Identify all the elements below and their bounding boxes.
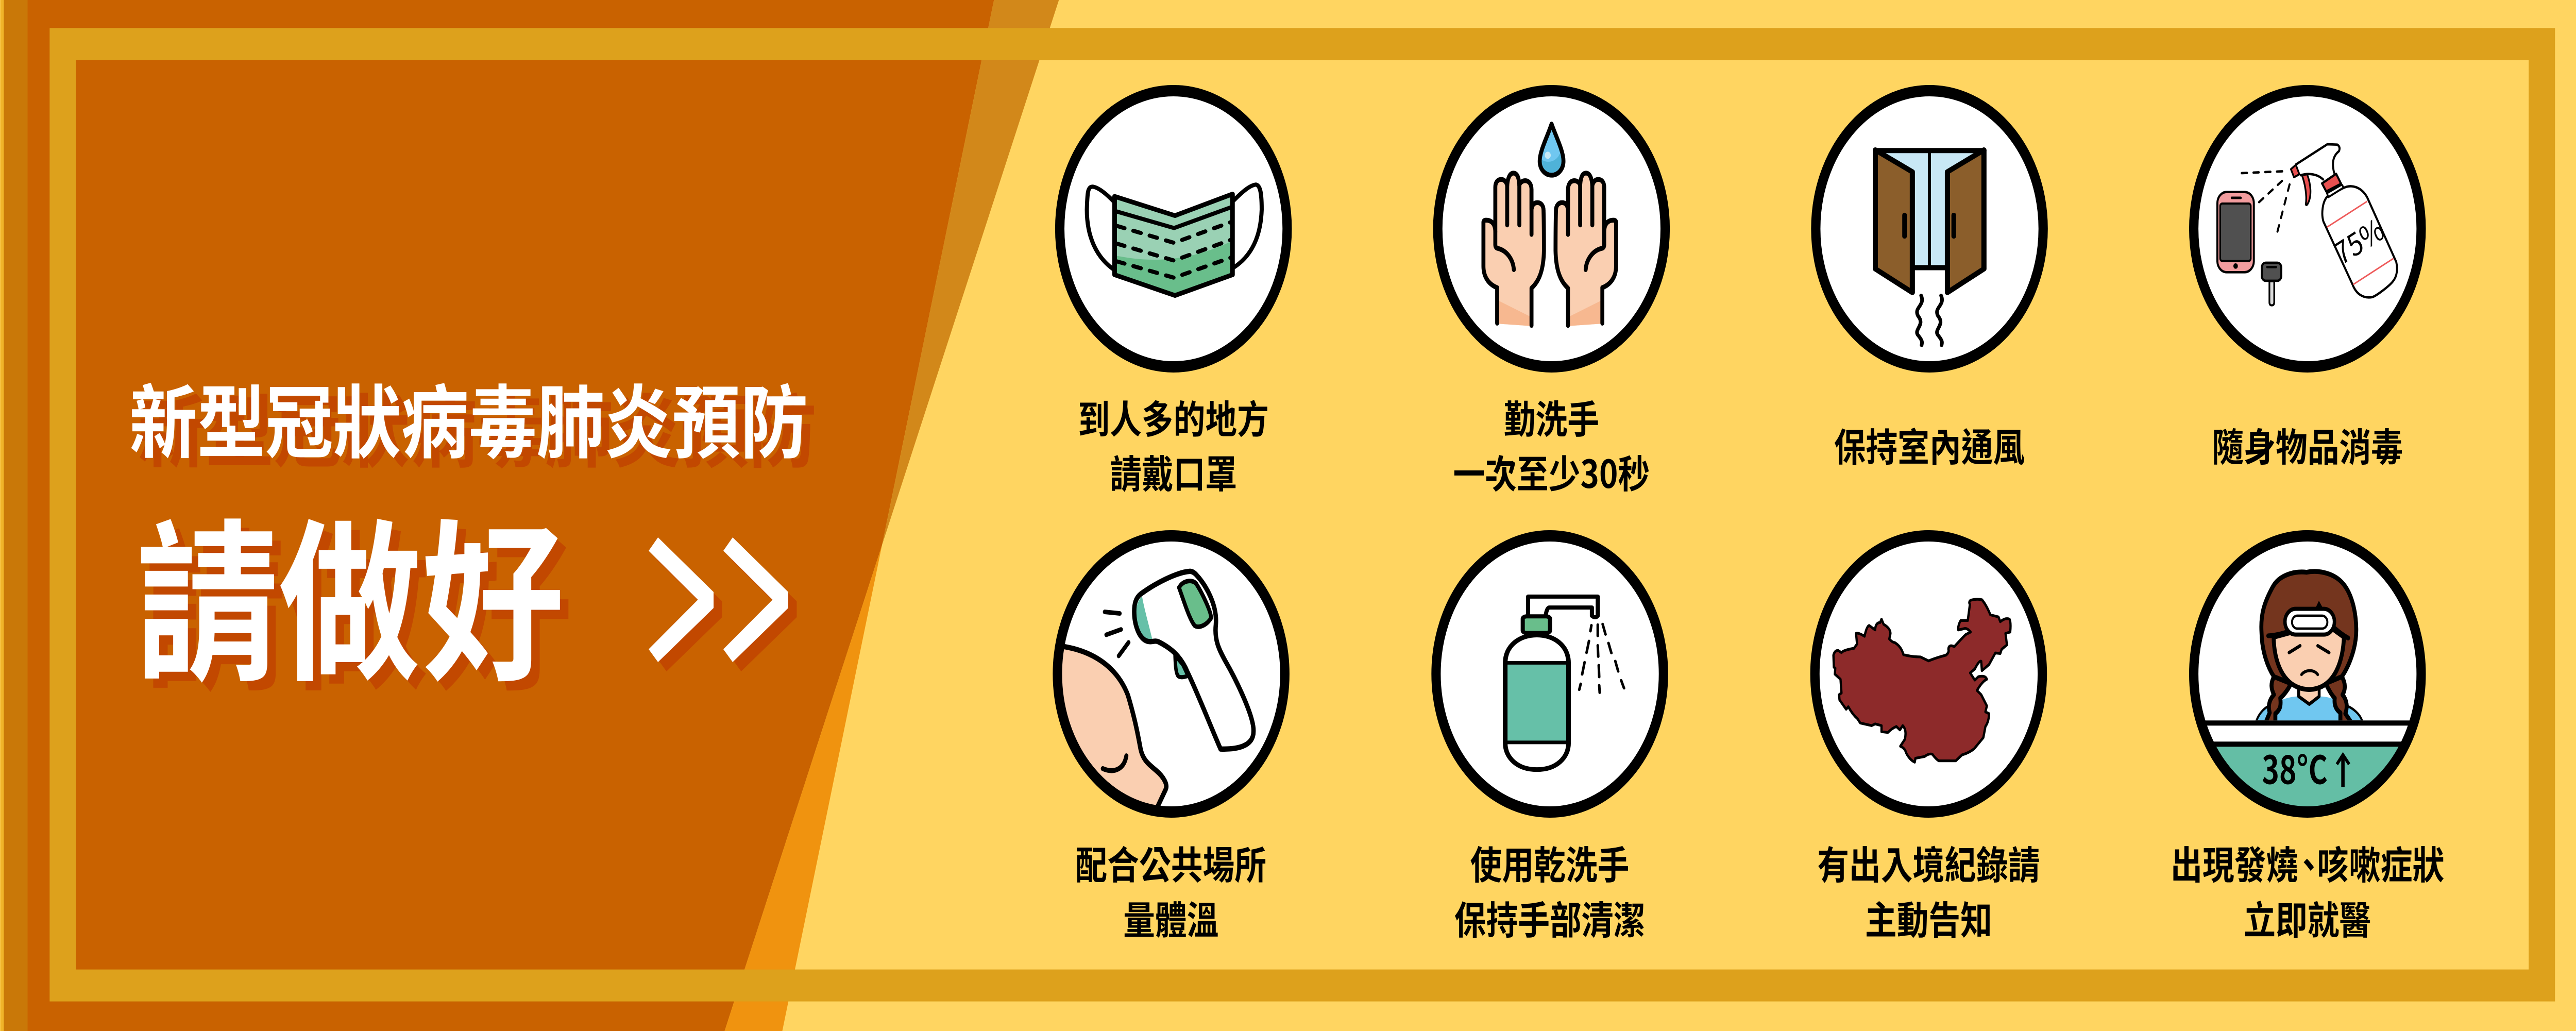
label: 隨身物品消毒 bbox=[2212, 416, 2403, 472]
panel: dark orange title area bbox=[4, 0, 994, 1031]
icon circle bbox=[1436, 536, 1664, 812]
panel: temperature check item bbox=[1051, 536, 1285, 945]
icon: map of China bbox=[1834, 599, 2010, 762]
icon circle bbox=[2194, 536, 2421, 812]
icon circle outline bbox=[2194, 536, 2421, 812]
panel: fever symptoms item bbox=[2171, 536, 2444, 945]
left edge stripe light bbox=[1, 0, 4, 1031]
label: 請戴口罩 bbox=[1110, 443, 1237, 499]
label: 一次至少30秒 bbox=[1453, 443, 1650, 499]
label bbox=[1075, 834, 1266, 945]
icon circle bbox=[1057, 536, 1285, 812]
icon circle bbox=[1438, 91, 1665, 367]
label: 立即就醫 bbox=[2244, 889, 2371, 945]
icon: open doors bbox=[1875, 150, 1984, 345]
label: 量體溫 bbox=[1123, 889, 1218, 945]
label bbox=[1453, 388, 1650, 499]
label: 配合公共場所 bbox=[1075, 834, 1266, 890]
panel: travel history item bbox=[1815, 536, 2042, 945]
label: 勤洗手 bbox=[1504, 388, 1599, 445]
label: 主動告知 bbox=[1865, 889, 1992, 945]
panel: ventilation item bbox=[1816, 91, 2043, 472]
icon circle bbox=[1815, 536, 2042, 812]
diagonal accent: dark gold bbox=[882, 0, 1059, 545]
icon circle bbox=[1060, 91, 1287, 367]
label bbox=[1817, 834, 2040, 945]
label: 有出入境紀錄請 bbox=[1817, 834, 2040, 890]
icon circle bbox=[1816, 91, 2043, 367]
icon: sick girl and 38°C band bbox=[2205, 569, 2410, 806]
icon: spray bottle, phone and key: 75% bbox=[2327, 206, 2389, 274]
heading: subtitle: 新型冠狀病毒肺炎預防 bbox=[138, 368, 817, 484]
label: 保持室內通風 bbox=[1834, 416, 2025, 472]
panel: hand washing item bbox=[1438, 91, 1665, 499]
icon circle outline bbox=[1057, 536, 1285, 812]
heading: subtitle: 新型冠狀病毒肺炎預防 bbox=[129, 359, 808, 475]
label: 到人多的地方 bbox=[1078, 388, 1269, 445]
label: 保持手部清潔 bbox=[1454, 889, 1645, 945]
icon: face mask bbox=[1087, 184, 1262, 295]
heading: main title: 請做好 bbox=[144, 474, 573, 725]
panel: mask item bbox=[1060, 91, 1287, 499]
heading: main title: 請做好 bbox=[136, 465, 564, 716]
label: 出現發燒、咳嗽症狀 bbox=[2171, 834, 2444, 890]
icon: sick girl and 38°C band: 38°C bbox=[2262, 739, 2328, 795]
icon: sanitizer pump bottle bbox=[1505, 597, 1624, 770]
left edge stripe dark bbox=[4, 0, 28, 1031]
panel: hand sanitizer item bbox=[1436, 536, 1664, 945]
icon circle bbox=[2194, 91, 2421, 367]
label bbox=[1078, 388, 1269, 499]
panel: disinfect belongings item bbox=[2194, 91, 2421, 472]
icon: forehead thermometer bbox=[1051, 571, 1253, 815]
icon: double chevron arrow bbox=[649, 537, 796, 671]
label bbox=[2171, 834, 2444, 945]
diagonal accent: orange bbox=[724, 545, 882, 1031]
label bbox=[1454, 834, 1645, 945]
icon: hands and water drop bbox=[1483, 124, 1616, 326]
icon: spray bottle, phone and key bbox=[2217, 144, 2397, 306]
label: 使用乾洗手 bbox=[1470, 834, 1629, 890]
